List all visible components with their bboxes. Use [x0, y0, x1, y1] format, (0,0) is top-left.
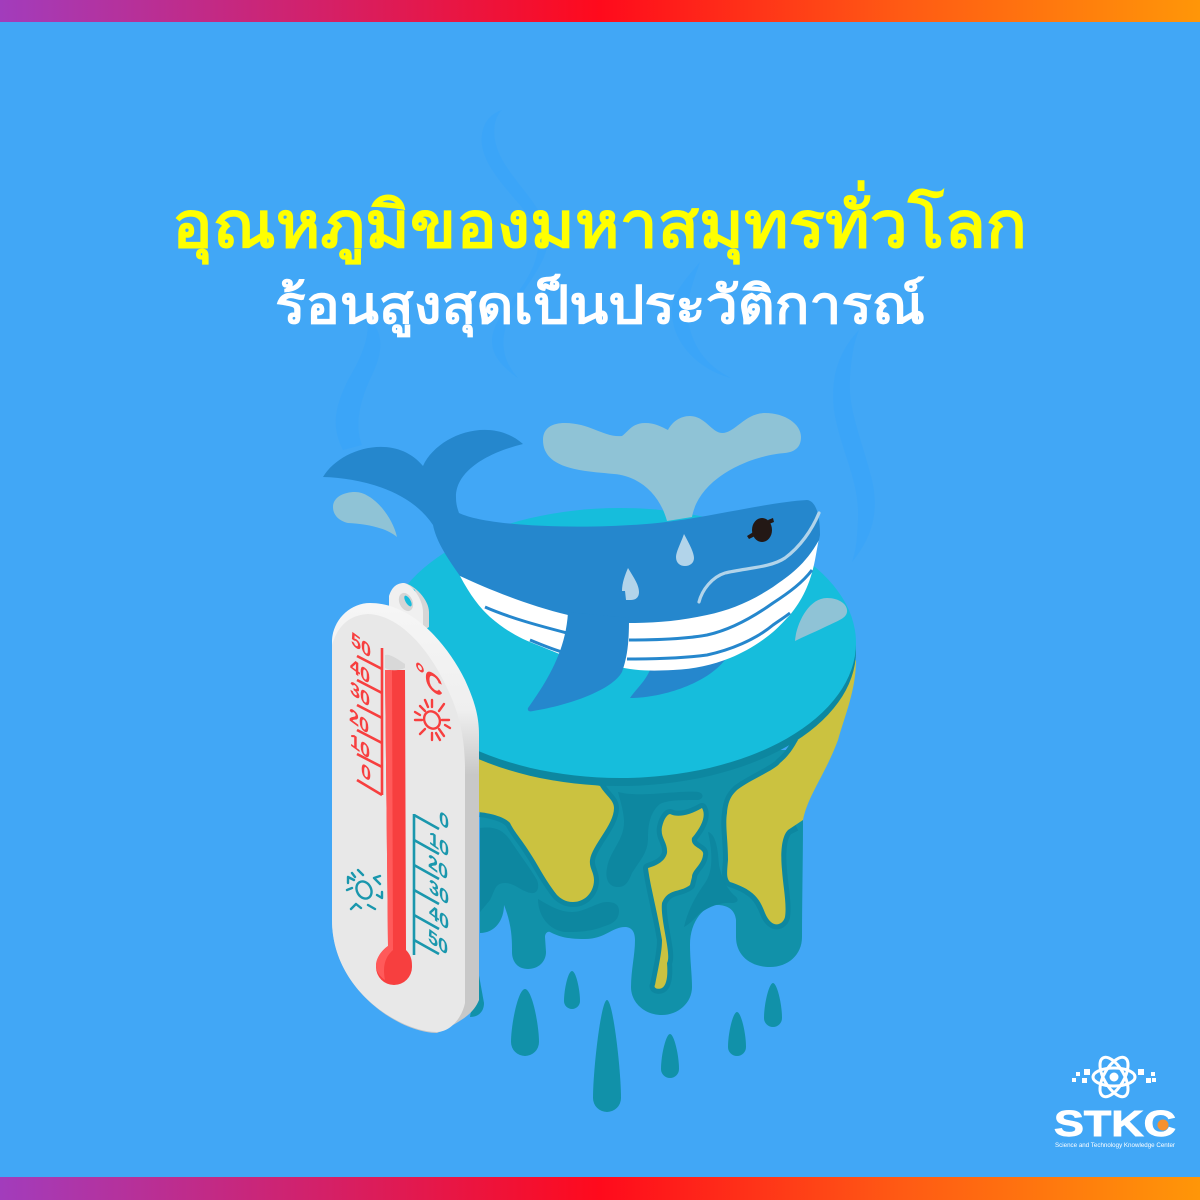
- ocean surface: [384, 508, 856, 778]
- title line 1: อุณหภูมิของมหาสมุทรทั่วโลก: [172, 180, 1027, 265]
- mercury highlight: [376, 670, 393, 980]
- whale main flipper: [528, 612, 629, 711]
- yellow land: [478, 660, 856, 989]
- teal scale numbers: 30: [429, 875, 449, 910]
- yellow land outlines: [480, 740, 798, 989]
- logo pixel squares: [1072, 1069, 1156, 1083]
- hook hole opening: [403, 595, 413, 607]
- falling drops: [470, 970, 782, 1112]
- teal melting base: [480, 750, 803, 1015]
- water splash left: [333, 492, 397, 537]
- red scale numbers: 50: [351, 628, 371, 663]
- whale eye: [747, 518, 774, 542]
- teal scale numbers: 50: [428, 925, 448, 960]
- thermometer front face: [332, 614, 465, 1032]
- red scale numbers: [349, 628, 371, 787]
- logo orange dot: [1158, 1120, 1168, 1130]
- bottom gradient band: [0, 1177, 1200, 1200]
- teal scale numbers: 20: [428, 850, 448, 885]
- belly stripes: [485, 570, 812, 659]
- whale far flipper: [630, 660, 725, 698]
- sweat drops: [622, 534, 694, 600]
- water spout: [543, 413, 801, 521]
- red scale numbers: 0: [361, 759, 371, 787]
- red scale numbers: 40: [350, 654, 370, 689]
- whale: [323, 430, 820, 711]
- STKC logo: [1054, 1053, 1176, 1149]
- red scale numbers: 10: [350, 729, 370, 764]
- logo atom: [1093, 1053, 1135, 1101]
- steam ribbons: [336, 110, 875, 562]
- dark teal patches: [480, 792, 738, 932]
- teal scale numbers: [428, 807, 449, 960]
- whale white belly: [460, 538, 819, 671]
- whale mouth line: [699, 513, 819, 602]
- water splash right: [795, 598, 847, 641]
- title: two lines: [172, 180, 1027, 338]
- logo wordmark: STKC: [1054, 1103, 1176, 1144]
- thermometer hook front: [389, 583, 423, 631]
- celsius label: °C: [415, 655, 443, 705]
- teal scale numbers: 10: [429, 827, 449, 862]
- teal scale numbers: 0: [439, 807, 449, 835]
- red scale: [357, 648, 382, 795]
- thermometer hook side: [404, 583, 429, 631]
- teal scale numbers: 40: [429, 900, 449, 935]
- mercury tube: [376, 670, 412, 985]
- melting earth and ocean: [384, 508, 856, 1112]
- ocean rim: [384, 516, 856, 786]
- thermometer body edge: [332, 603, 479, 1033]
- teal sun: [347, 870, 382, 909]
- title line 2: ร้อนสูงสุดเป็นประวัติการณ์: [275, 274, 925, 338]
- tube cap: [385, 655, 405, 670]
- teal scale: [414, 814, 439, 955]
- red scale numbers: 30: [350, 677, 370, 712]
- logo tagline: Science and Technology Knowledge Center: [1055, 1143, 1175, 1149]
- whale body and tail: [323, 430, 820, 623]
- top gradient band: [0, 0, 1200, 22]
- red scale numbers: 20: [349, 704, 369, 739]
- thermometer: [332, 583, 479, 1033]
- hook hole: [396, 591, 416, 613]
- red sun: [415, 700, 450, 740]
